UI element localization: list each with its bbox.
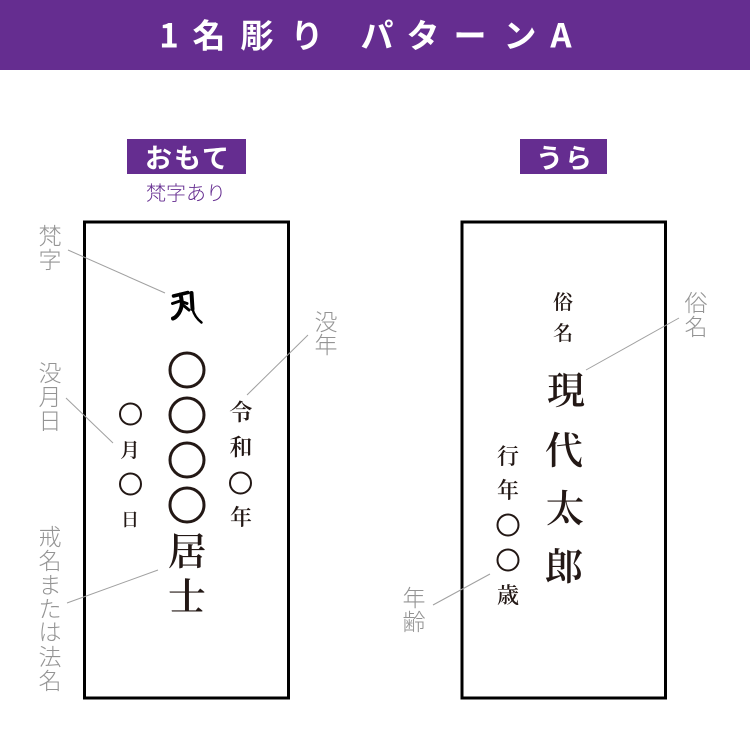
heading: front (127, 139, 246, 174)
leader: death year (247, 335, 308, 395)
leader: age (433, 574, 490, 605)
death date inscription: 日 (121, 510, 139, 530)
title: 1名彫りパターンA (159, 10, 572, 58)
age inscription (497, 444, 519, 608)
header band (0, 0, 750, 70)
death year inscription: 年 (230, 505, 252, 530)
death year inscription (230, 400, 252, 530)
leader: secular name (586, 318, 679, 370)
heading: back: うら (536, 144, 594, 174)
name inscription: 現代太郎 (545, 371, 585, 589)
heading: front: おもて (145, 144, 231, 174)
label: death date: 没月日 (38, 360, 62, 434)
title suffix: koji: 居士 (168, 532, 206, 619)
leader: posthumous name (67, 570, 158, 603)
death date inscription (120, 404, 141, 530)
panel: front tablet (84, 222, 288, 698)
secular name small caption: 俗名 (553, 291, 573, 345)
label: death year: 没年 (314, 309, 338, 358)
leader: death date (66, 398, 113, 443)
leader: bonji (68, 250, 165, 293)
label: posthumous name: 戒名または法名 (38, 524, 62, 694)
posthumous name circles (170, 353, 204, 522)
sub heading: with bonji: 梵字あり (146, 182, 226, 205)
label: age: 年齢 (402, 585, 426, 635)
death year inscription: 令和 (230, 400, 252, 460)
death date inscription: 月 (120, 439, 140, 462)
panel: back tablet (462, 222, 666, 698)
age inscription: 行年 (497, 444, 519, 503)
label: bonji: 梵字 (38, 223, 62, 273)
age inscription: 歳 (497, 583, 519, 608)
icon: bonji character (172, 292, 202, 322)
heading: back (520, 139, 607, 174)
label: secular name: 俗名 (684, 290, 708, 340)
